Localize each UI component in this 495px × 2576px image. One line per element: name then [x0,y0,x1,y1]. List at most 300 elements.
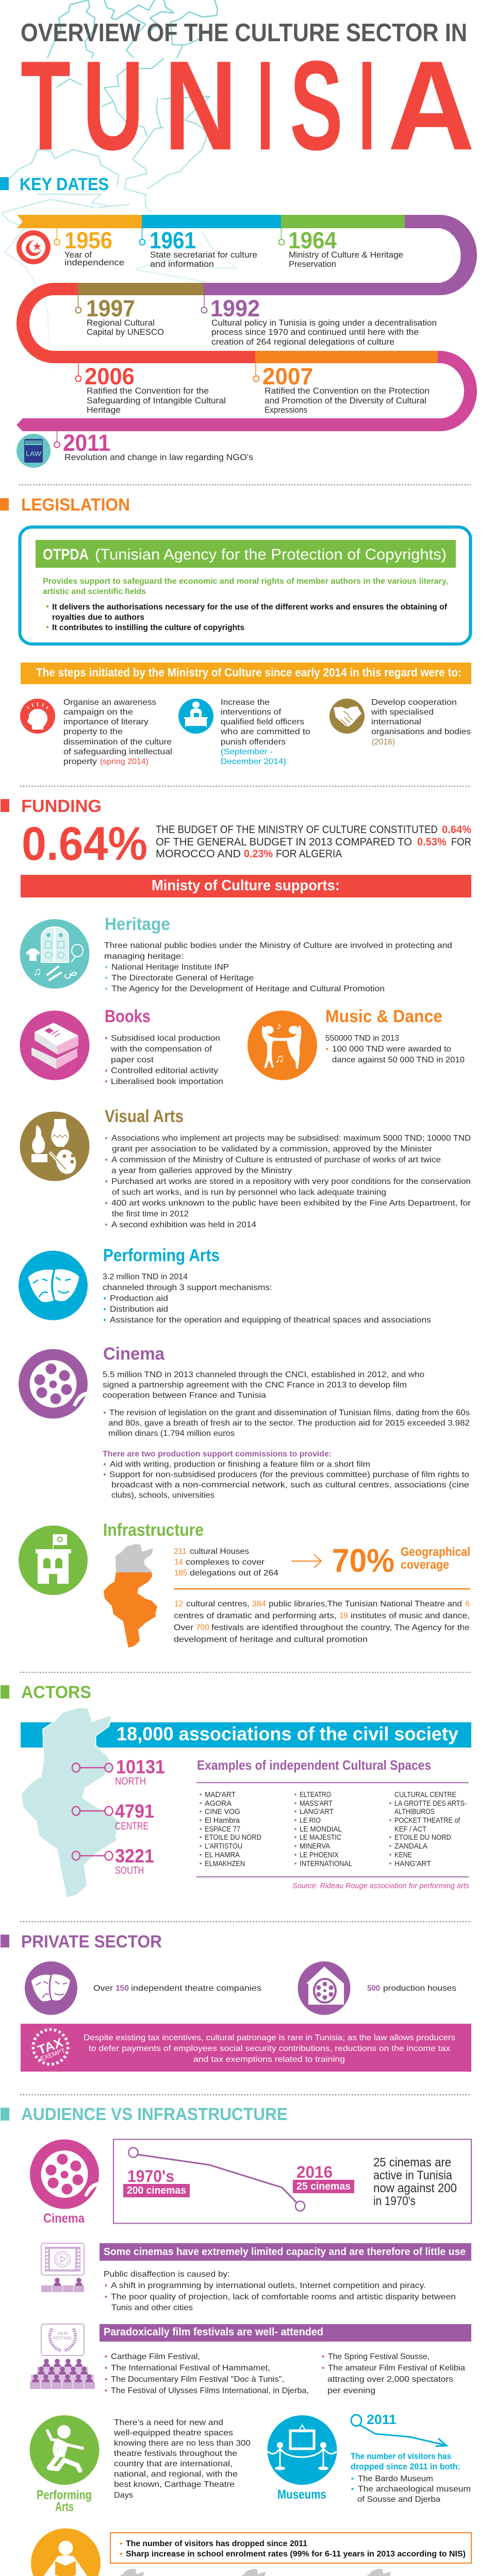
text block: budget comparison: 0.53% [417,836,447,848]
stat: 150 theatre companies: Over [93,1984,113,1993]
section: film festivals: Paradoxically film festivals are well- attended [104,2326,323,2338]
section: visual arts text: a year from galleries approved by the Ministry [111,1166,292,1175]
list column 1: EL HAMRA [205,1851,240,1859]
event 1992: process since 1970 and continued until here with the [211,328,419,337]
list column 2: LE MAJESTIC [300,1833,341,1842]
section: performing arts text: 3.2 million TND in 2014 [103,1273,188,1281]
heading: key dates: KEY DATES [20,175,109,194]
list column 3: LA GROTTE DES ARTS- [394,1799,467,1808]
event 1997: Capital by UNESCO [87,328,164,337]
title line: Tunisia: U [82,35,144,177]
event 1961: and information [150,260,214,269]
icon: law book: LAW [26,450,42,457]
region: south: SOUTH [115,1865,144,1876]
section: cinema text: 5.5 million TND in 2013 channeled through the CNCI, established in 2012, and who [103,1370,424,1379]
text: theatre spaces: knowing there are no less than 300 [114,2439,251,2448]
section: performing arts text [103,1246,431,1325]
text block: budget comparison: MOROCCO AND [156,848,241,860]
step text: cooperation: Develop cooperation [371,698,457,707]
section: film festivals: The International Festival of Hammamet, [111,2364,270,2372]
panel: tax incentives: and tax exemptions related to training [193,2055,345,2064]
infrastructure paragraph: public libraries,The Tunisian National Theatre and [269,1600,462,1608]
icon: production houses [298,1961,351,2015]
list column 1: AGORA [205,1799,232,1808]
list column 3 [389,1790,467,1868]
heading: actors: ACTORS [21,1683,91,1702]
event 2011 [54,430,253,462]
panel: tax incentives: to defer payments of employees social security contributions, reductions on the income tax [89,2044,450,2053]
icon: officer at desk [178,699,213,734]
step text: field officers: qualified field officers [221,718,304,726]
event 1997 [75,295,164,337]
icon: books [20,1011,90,1080]
step text: field officers: interventions of [221,708,282,717]
panel: independent cultural spaces [196,1757,469,1890]
step text: awareness campaign: importance of literary [63,718,148,726]
section: music and dance text: 100 000 TND were awarded to [332,1045,451,1054]
step text: field officers: who are committed to [220,727,310,736]
step text: cooperation [371,698,471,747]
section: music and dance text: 550000 TND in 2013 [325,1034,399,1043]
text: museums visitors: The number of visitors has [351,2451,451,2461]
callout: visitors and enrolment [110,2533,471,2563]
icon: tax exempt stamp [34,2030,68,2064]
section: heritage text [104,914,452,993]
callout: visitors and enrolment: The number of visitors has dropped since 2011 [126,2539,307,2548]
stat: 150 theatre companies: independent theatre companies [131,1984,261,1993]
banner: ministry supports: Ministy of Culture supports: [152,877,340,894]
stat: 70 percent geographical coverage: Geographical [401,1545,470,1559]
trend arrow: visitors since 2011 [351,2412,447,2446]
heading: private sector: PRIVATE SECTOR [21,1932,162,1952]
section: infrastructure title: Infrastructure [103,1520,204,1540]
icon: cinema reel magenta: Cinema [43,2211,85,2226]
region: centre [72,1801,154,1832]
heading: legislation: LEGISLATION [21,495,130,515]
section: performing arts text: Distribution aid [110,1305,168,1314]
section: books text: paper cost [111,1056,154,1064]
section: heritage text: Heritage [105,914,170,934]
section: film festivals: Carthage Film Festival, [111,2352,200,2361]
stat: 0.64 percent: 0.64% [22,818,147,870]
section: books text: Controlled editorial activity [111,1066,218,1075]
text: theatre spaces: Days [114,2491,133,2500]
text: cinema summary [373,2156,457,2208]
section: film festivals: attracting over 2,000 spectators [327,2375,453,2384]
icon: cinema reel [19,1349,88,1419]
event 2006: Safeguarding of Intangible Cultural [87,396,226,405]
list column 1: El Hambra [205,1816,240,1825]
section: music and dance text [325,1007,465,1064]
list column 1: ETOILE DU NORD [205,1833,261,1842]
banner: ministry supports [21,875,471,897]
infrastructure paragraph: cultural centres, [186,1600,250,1608]
event 1964: Preservation [289,260,336,269]
text block: budget comparison: OF THE GENERAL BUDGET IN 2013 COMPARED TO [156,836,412,848]
label: performing arts: Performing [37,2488,92,2502]
infrastructure paragraph: 700 [196,1623,209,1632]
arrow [291,1554,321,1568]
region: north [72,1756,165,1787]
event 2006 [75,363,226,415]
infrastructure counts: 211 [174,1547,187,1556]
step text: awareness campaign: of safeguarding intellectual [63,748,172,756]
chart: cinemas decline: 1970's [127,2167,174,2185]
section: visual arts text: A second exhibition was held in 2014 [111,1221,256,1229]
section: visual arts text: of such art works, and is run by personnel who lack adequate training [112,1188,386,1197]
panel: OTPDA: artistic and scientific fields [43,587,146,596]
event 1997: 1997 [86,295,135,321]
event 2011: Revolution and change in law regarding NGO's [64,453,253,462]
icon: film festival audience: FILM [58,2331,68,2336]
icon: performing arts dancer [30,2415,99,2485]
list column 2: LANG'ART [300,1807,334,1816]
stat: 500 production houses: 500 [367,1984,380,1993]
infrastructure paragraph: institutes of music and dance, [351,1612,470,1620]
list column 3: HANG'ART [394,1859,431,1868]
text: theatre spaces: well-equipped theatre spaces [113,2429,233,2437]
event 1961: 1961 [150,227,196,253]
section: limited capacity: A shift in programming by international outlets, Internet competition and piracy. [111,2281,426,2290]
event 1956: 1956 [64,227,112,253]
section: heritage text: managing heritage: [104,952,184,961]
section: cinema text: signed a partnership agreement with the CNC France in 2013 to develop film [103,1381,407,1389]
list column 1: ELMAKHZEN [205,1859,245,1868]
map: 70 percent coverage [104,1544,157,1648]
list column 1 [200,1790,261,1868]
section: visual arts text: grant per association to be validated by a commission, approved by the Minister [112,1145,433,1154]
panel: tax incentives [21,2024,471,2072]
event 2006: Ratified the Convention for the [87,386,209,396]
stat: 150 theatre companies [93,1984,261,1993]
section: visual arts text: the first time in 2012 [112,1210,189,1218]
text: theatre spaces: country that are international, [114,2460,233,2468]
map: Tunisia regions [21,1707,119,1898]
event 2006: Heritage [87,405,121,415]
section: visual arts text: Purchased art works are stored in a repository with very poor conditions for the conservation [111,1177,471,1186]
icon: music and dance [248,1011,317,1080]
source note: Source: Rideau Rouge association for performing arts [292,1882,469,1890]
text block: budget comparison: FOR ALGERIA [276,848,342,860]
section: visual arts text [105,1107,471,1229]
stat: 22.74 percent [241,2569,266,2576]
text: museums visitors: dropped since 2011 in both: [351,2462,460,2471]
section: film festivals: The Spring Festival Sousse, [328,2352,430,2361]
text: theatre spaces: theatre festivals throughout the [114,2449,237,2458]
stat: 77.26 percent [367,2569,391,2576]
event 1992: creation of 264 regional delegations of culture [211,337,394,347]
icon: cinema reel magenta [30,2139,99,2226]
step text: cooperation: with specialised [371,708,434,717]
section: books text: Books [105,1007,151,1026]
stat: 13.15 percent [120,2569,144,2576]
stat: 70 percent geographical coverage: 70% [332,1542,394,1579]
event 1956: Year of [64,250,92,260]
event 1961: State secretariat for culture [150,250,257,260]
event 2007: Expressions [265,405,307,415]
infrastructure paragraph: 384 [252,1600,266,1608]
section: limited capacity: Tunis and other cities [111,2303,193,2312]
infrastructure counts [174,1547,278,1578]
step text: field officers: punish offenders [221,738,286,747]
region: north: NORTH [115,1776,146,1787]
list column 1: MAD'ART [205,1790,236,1799]
section: limited capacity: Some cinemas have extremely limited capacity and are therefore of little use [104,2246,466,2258]
event 2007: Ratified the Convention on the Protection [265,386,430,396]
step text: field officers [220,698,310,766]
panel: OTPDA: It contributes to instilling the culture of copyrights [52,623,244,632]
event 1956: independence [64,258,124,267]
list column 2: MASS'ART [300,1799,333,1808]
text block: budget comparison: FOR [451,836,471,848]
icon: literacy reader [31,2529,101,2576]
list column 2: LE MONDIAL [300,1825,342,1834]
text block: budget comparison: 0.64% [442,824,471,836]
section: books text: Liberalised book importation [111,1077,223,1086]
step text: awareness campaign: property [63,757,97,766]
icon: Tunisian flag [16,230,51,264]
icon: music and dance: ♫ [275,1052,284,1065]
section: cinema text: and 80s, gave a breath of fresh air to the sector. The production aid for 2015 exceeded 3.982 [108,1419,470,1428]
list column 2 [294,1790,352,1868]
infrastructure counts: 185 [174,1569,187,1578]
section: cinema text: Support for non-subsidised producers (for the previous committee) purchase of film rights to [109,1470,469,1479]
banner: associations: 18,000 associations of the civil society [117,1723,458,1744]
section: performing arts text: Performing Arts [103,1246,220,1265]
panel: OTPDA: Provides support to safeguard the economic and moral rights of member authors in the various literary, [43,577,448,586]
icon: performing arts masks [19,1251,88,1320]
section: visual arts text: Visual Arts [105,1107,184,1126]
section: heritage text: The Agency for the Development of Heritage and Cultural Promotion [111,985,385,993]
title line: Tunisia: I [358,35,375,177]
section: performing arts text: Assistance for the operation and equipping of theatrical spaces and associations [110,1316,431,1325]
panel: OTPDA: It delivers the authorisations necessary for the use of the different works and ensures the obtaining of [52,603,448,612]
section: music and dance text: dance against 50 000 TND in 2010 [332,1056,465,1064]
infrastructure paragraph: festivals are identified throughout the country, The Agency for the [211,1623,470,1632]
list column 2: ELTEATRO [300,1790,331,1799]
region: centre: CENTRE [115,1821,148,1832]
section: heritage text: The Directorate General of Heritage [111,974,254,982]
chart: cinemas decline [113,2139,471,2224]
panel: OTPDA: royalties due to authors [52,613,144,622]
text: theatre spaces: national, and regional, with the [114,2470,238,2479]
callout: visitors and enrolment: Sharp increase in school enrolment rates (99% for 6-11 years in 2013 according to NIS) [126,2550,466,2558]
icon: tax exempt stamp: EXEMPT [39,2046,67,2062]
list column 3: KEF / ACT [394,1825,426,1834]
step text: field officers: (September - [221,748,273,756]
background map outline [0,0,236,371]
text block: budget comparison [156,824,471,860]
text: cinema summary: now against 200 [373,2181,457,2195]
section: film festivals: The amateur Film Festival of Kelibia [328,2364,465,2372]
icon: visual arts [20,1112,90,1181]
chart: cinemas decline: 2016 [296,2163,333,2181]
title line: Tunisia: A [388,35,475,177]
section: cinema text: cooperation between France and Tunisia [103,1391,266,1400]
event 2007: and Promotion of the Diversity of Cultural [265,396,426,405]
title line: Tunisia: T [21,35,71,177]
section: books text: with the compensation of [110,1045,212,1054]
label: museums: Museums [277,2487,326,2502]
event 1992: 1992 [210,295,260,321]
section: limited capacity: Public disaffection is caused by: [104,2270,230,2279]
region: centre: 4791 [115,1801,154,1822]
infrastructure counts: cultural Houses [190,1547,249,1556]
step text: awareness campaign: property to the [63,727,123,736]
text: museums visitors: The archaeological museum [358,2485,471,2494]
banner: associations [21,1722,471,1748]
section: visual arts text: A commission of the Ministry of Culture is entrusted of purchase of works of art twice [111,1156,441,1164]
step text: cooperation: organisations and bodies [371,727,471,736]
section: heritage text: National Heritage Institute INP [111,963,229,972]
list column 3: CULTURAL CENTRE [394,1790,456,1799]
infrastructure paragraph: 6 [466,1600,470,1608]
section: books text [105,1007,223,1086]
chart: cinemas decline: 200 cinemas [127,2185,186,2196]
infrastructure paragraph [174,1600,470,1644]
icon: film festival audience [30,2324,95,2389]
infrastructure paragraph: Over [174,1623,194,1632]
section: limited capacity: The poor quality of projection, lack of comfortable rooms and artistic disparity between [111,2293,456,2301]
step text: cooperation: international [371,718,421,726]
step text: field officers: December 2014) [221,757,286,766]
panel: OTPDA [20,527,470,644]
infrastructure paragraph: development of heritage and cultural promotion [174,1635,368,1644]
heading: funding: FUNDING [21,796,102,816]
list column 3: ZANDALA [394,1842,427,1851]
section: books text: Subsidised local production [111,1034,220,1043]
list column 2: INTERNATIONAL [300,1859,352,1868]
text: museums visitors: The Bardo Museum [358,2475,433,2483]
title line: Tunisia: N [164,35,237,177]
event 1961 [139,227,257,269]
infrastructure paragraph: 12 [174,1600,183,1608]
event 1992 [201,295,437,347]
banner: steps: The steps initiated by the Ministry of Culture since early 2014 in this regard were to: [36,666,461,679]
text: cinema summary: active in Tunisia [373,2168,453,2182]
heading: audience vs infrastructure: AUDIENCE VS INFRASTRUCTURE [21,2105,288,2124]
infrastructure paragraph: 19 [339,1612,348,1620]
list column 2: LE RIO [300,1816,321,1825]
panel: OTPDA: (Tunisian Agency for the Protection of Copyrights) [95,546,447,563]
step text: awareness campaign [63,698,172,766]
event 1964: Ministry of Culture & Heritage [289,250,403,260]
list column 1: ESPACE 77 [205,1825,240,1834]
infrastructure counts: complexes to cover [186,1558,265,1567]
event 2007 [254,363,430,415]
section: cinema text: Cinema [103,1344,165,1364]
title line: Tunisia: I [257,35,274,177]
icon: law book [16,434,51,468]
title [21,19,475,177]
list column 3: ETOILE DU NORD [394,1833,451,1842]
icon: infrastructure building [19,1526,88,1595]
infrastructure counts: delegations out of 264 [190,1569,278,1578]
icon: film festival audience: FESTIVAL [53,2336,73,2341]
list column 3: KENE [394,1851,412,1859]
list column 2: MINERVA [300,1842,330,1851]
section: cinema text: Aid with writing, production or finishing a feature film or a short film [110,1460,370,1469]
icon: heritage: ♫ [33,965,41,978]
chart: cinemas decline: 25 cinemas [296,2181,351,2192]
section: performing arts text: Production aid [110,1294,168,1303]
label: performing arts [37,2488,92,2514]
icon: tax exempt stamp: TAX [36,2035,65,2058]
region: south: 3221 [115,1845,154,1867]
trend arrow: visitors since 2011: 2011 [367,2412,397,2427]
timeline ribbon [16,215,477,431]
text: cinema summary: 25 cinemas are [373,2156,451,2170]
section: cinema text: The revision of legislation on the grant and dissemination of Tunisian films, dating from the 60s [109,1409,470,1417]
stat: 150 theatre companies: 150 [116,1984,129,1993]
panel: OTPDA: OTPDA [43,546,89,563]
event 2007: 2007 [262,363,313,389]
section: performing arts text: channeled through 3 support mechanisms: [103,1283,272,1292]
section: film festivals: The Documentary Film Festival "Doc à Tunis", [111,2375,284,2384]
event 2006: 2006 [85,363,135,389]
text: cinema summary: in 1970's [373,2194,416,2208]
text: theatre spaces: There's a need for new and [114,2418,223,2427]
infrastructure counts: 14 [174,1558,183,1567]
panel: tax incentives: Despite existing tax incentives, cultural patronage is rare in Tunisia; as the law allows producers [84,2033,455,2042]
region: south [72,1845,154,1876]
section: cinema text: clubs), schools, universities [111,1491,214,1500]
step text: awareness campaign: Organise an awareness [63,698,156,707]
section: film festivals: per evening [327,2386,375,2395]
text block: budget comparison: THE BUDGET OF THE MINISTRY OF CULTURE CONSTITUTED [156,824,438,836]
section: film festivals [100,2324,471,2395]
section: film festivals: The Festival of Ulysses Films International, in Djerba, [111,2386,309,2395]
list column 3: POCKET THEATRE of [394,1816,460,1825]
infrastructure paragraph: centres of dramatic and performing arts, [174,1612,337,1620]
region: north: 10131 [116,1756,165,1777]
banner: steps [21,663,471,684]
list column 2: LE PHOENIX [300,1851,339,1859]
section: cinema text: broadcast with a non-commercial network, such as cultural centres, associations (cine [111,1481,469,1489]
list column 1: CINE VOG [205,1807,240,1816]
section: heritage text: Three national public bodies under the Ministry of Culture are involved in protecting and [104,941,452,950]
text: museums visitors: of Sousse and Djerba [357,2495,440,2504]
label: performing arts: Arts [55,2500,74,2514]
text: museums visitors [351,2451,471,2504]
event 2011: 2011 [63,430,110,456]
text: theatre spaces [113,2418,251,2500]
stat: 70 percent geographical coverage: coverage [401,1558,449,1572]
text: theatre spaces: best known, Carthage Theatre [114,2480,235,2489]
event 1964 [278,227,403,269]
list column 1: L'ARTISTOU [205,1842,242,1851]
section: cinema text: million dinars (1.794 million euros [108,1429,235,1438]
icon: handshake [329,699,365,734]
section: cinema text: There are two production support commissions to provide: [103,1450,332,1459]
stat: 500 production houses: production houses [383,1984,456,1993]
list column 3: ALTHIBUROS [394,1807,435,1816]
section: limited capacity [100,2243,471,2312]
section: cinema text [103,1344,470,1500]
icon: museum exhibit [267,2415,337,2485]
step text: cooperation: (2016) [372,738,395,747]
section: visual arts text: Associations who implement art projects may be subsidised: maximum 5000 TND; 10000 TND [111,1134,471,1143]
icon: heritage [20,919,90,989]
event 1956 [54,227,124,267]
section: music and dance text: Music & Dance [325,1007,442,1026]
icon: idea head [20,699,55,734]
event 1997: Regional Cultural [87,318,155,328]
icon: theatre companies [25,1961,77,2015]
step text: awareness campaign: campaign on the [63,708,133,717]
section: visual arts text: 400 art works unknown to the public have been exhibited by the Fine Arts Department, for [111,1199,471,1208]
event 1992: Cultural policy in Tunisia is going under a decentralisation [211,318,437,328]
